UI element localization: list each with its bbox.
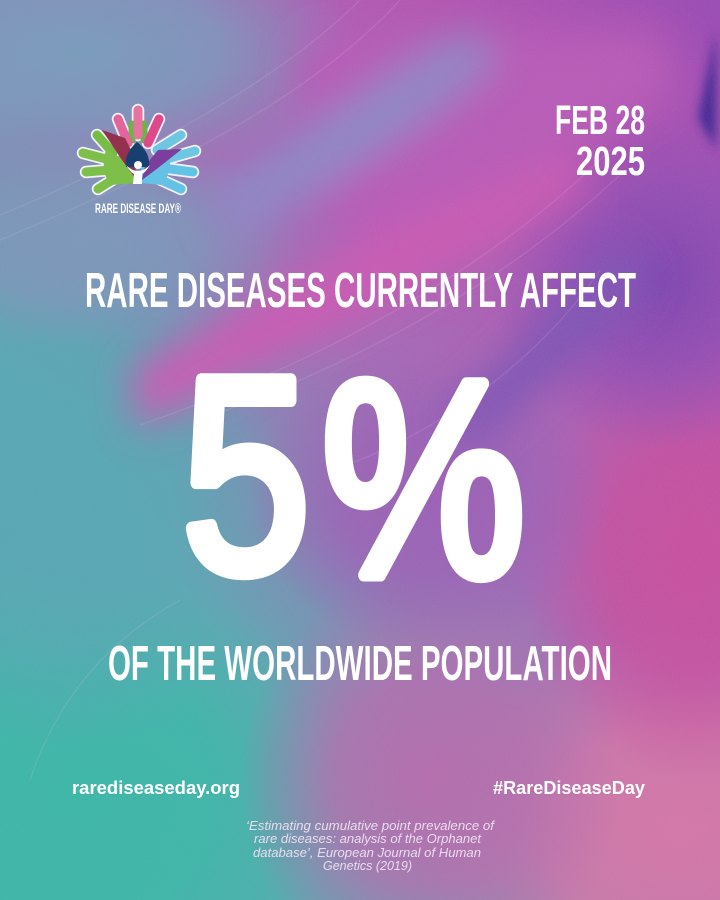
logo: Rare Disease Day hands xyxy=(83,110,195,216)
hashtag: #RareDiseaseDay xyxy=(493,777,646,798)
icon: palms xyxy=(104,150,136,185)
icon: coloured fingers xyxy=(83,110,195,189)
citation: database’, European Journal of Human xyxy=(253,846,481,860)
date xyxy=(555,97,645,184)
website link: rarediseaseday.org xyxy=(72,777,240,798)
icon: white outline of hands xyxy=(83,110,195,189)
citation xyxy=(246,819,496,873)
date: FEB 28 xyxy=(555,97,645,143)
citation: Genetics (2019) xyxy=(323,859,412,873)
citation: rare diseases: analysis of the Orphanet xyxy=(254,832,482,846)
icon: small centre fingers xyxy=(132,124,144,140)
icon: central figure xyxy=(126,142,150,184)
icon: crossing hands xyxy=(102,130,136,178)
big statistic: 5%: % xyxy=(322,323,525,634)
big statistic: 5%: 5 xyxy=(182,319,310,630)
logo wordmark: RARE DISEASE DAY® xyxy=(95,201,181,216)
citation: ‘Estimating cumulative point prevalence of xyxy=(246,819,496,833)
date: 2025 xyxy=(576,138,645,184)
